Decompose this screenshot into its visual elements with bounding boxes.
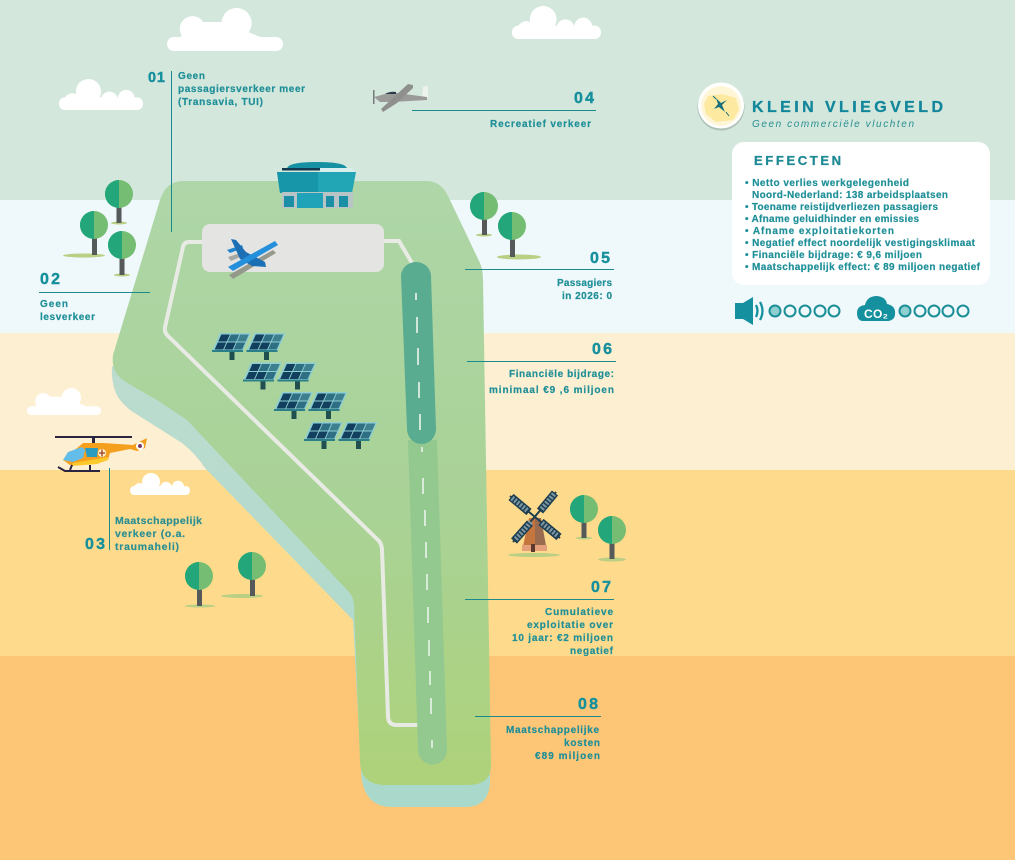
item 08: kosten xyxy=(564,738,600,749)
item 08: €89 miljoen xyxy=(535,751,600,762)
item 07: exploitatie over xyxy=(527,620,613,631)
title: Geen commerciële vluchten xyxy=(752,119,914,130)
icon: windmill xyxy=(508,492,560,557)
item 04: Recreatief verkeer xyxy=(490,119,591,130)
tree group near windmill xyxy=(570,495,626,562)
panel: effecten xyxy=(732,142,990,285)
effects list: • Afname exploitatiekorten xyxy=(745,226,894,237)
item 03 xyxy=(85,468,202,553)
item 08: Maatschappelijke xyxy=(506,725,599,736)
tree group right top xyxy=(470,192,541,260)
taxiway xyxy=(165,241,418,725)
parking apron xyxy=(202,224,384,272)
airfield ground xyxy=(113,181,491,785)
item 06: 06 xyxy=(592,341,612,358)
item 02: lesverkeer xyxy=(40,312,95,323)
item 05: Passagiers xyxy=(557,278,612,289)
item 07: 07 xyxy=(591,579,611,596)
item 03: Maatschappelijk xyxy=(115,515,202,527)
cloud middle left xyxy=(27,388,101,415)
effects list: Noord-Nederland: 138 arbeidsplaatsen xyxy=(752,190,948,201)
effects list: • Maatschappelijk effect: € 89 miljoen negatief xyxy=(745,262,981,273)
title xyxy=(752,99,943,130)
icon: CO2 rating xyxy=(857,296,968,321)
item 01 xyxy=(148,70,305,232)
tree group bottom left xyxy=(185,552,266,608)
item 08: 08 xyxy=(578,696,598,713)
effects list: • Netto verlies werkgelegenheid xyxy=(745,178,909,189)
effects list: • Afname geluidhinder en emissies xyxy=(745,214,919,225)
airfield ground shadow xyxy=(112,366,490,807)
cloud top left xyxy=(59,79,143,110)
runway xyxy=(401,262,447,764)
icon: helicopter xyxy=(55,436,147,471)
icon: grey airplane xyxy=(373,84,428,112)
item 08 xyxy=(475,696,601,762)
item 03: verkeer (o.a. xyxy=(115,528,185,540)
item 02: Geen xyxy=(40,299,68,310)
terminal building xyxy=(277,162,356,208)
effects list xyxy=(745,178,981,273)
item 04: 04 xyxy=(574,90,594,107)
item 01: (Transavia, TUI) xyxy=(178,97,263,108)
icon: sound rating xyxy=(735,297,840,325)
cloud top centre xyxy=(167,8,283,51)
item 07: Cumulatieve xyxy=(545,607,613,618)
item 07: 10 jaar: €2 miljoen xyxy=(512,633,613,644)
item 07 xyxy=(465,579,614,657)
item 01: passagiersverkeer meer xyxy=(178,84,305,95)
item 04 xyxy=(412,90,596,130)
item 02: 02 xyxy=(40,271,60,288)
cloud above text 03 xyxy=(130,473,190,495)
item 06: minimaal €9 ,6 miljoen xyxy=(489,385,614,396)
item 05: in 2026: 0 xyxy=(562,291,612,302)
item 05 xyxy=(465,250,614,302)
effects list: • Financiële bijdrage: € 9,6 miljoen xyxy=(745,250,922,261)
solar panels xyxy=(212,333,378,449)
tree group left top xyxy=(63,180,136,276)
icon: blue airplane on apron xyxy=(227,239,278,279)
effects list: • Negatief effect noordelijk vestigingsklimaat xyxy=(745,238,976,249)
cloud top right xyxy=(512,6,601,39)
item 06 xyxy=(467,341,616,396)
title: KLEIN VLIEGVELD xyxy=(752,99,943,116)
icon: map badge xyxy=(698,82,744,130)
item 06: Financiële bijdrage: xyxy=(509,369,614,380)
icon: CO2 rating: CO₂ xyxy=(864,307,888,321)
item 03: traumaheli) xyxy=(115,541,179,553)
item 02 xyxy=(39,271,150,323)
item 05: 05 xyxy=(590,250,610,267)
item 03: 03 xyxy=(85,536,105,553)
item 01: Geen xyxy=(178,71,205,82)
effects list: • Toename reistijdverliezen passagiers xyxy=(745,202,938,213)
panel heading: EFFECTEN xyxy=(754,153,841,168)
item 07: negatief xyxy=(570,646,614,657)
item 01: 01 xyxy=(148,70,165,86)
